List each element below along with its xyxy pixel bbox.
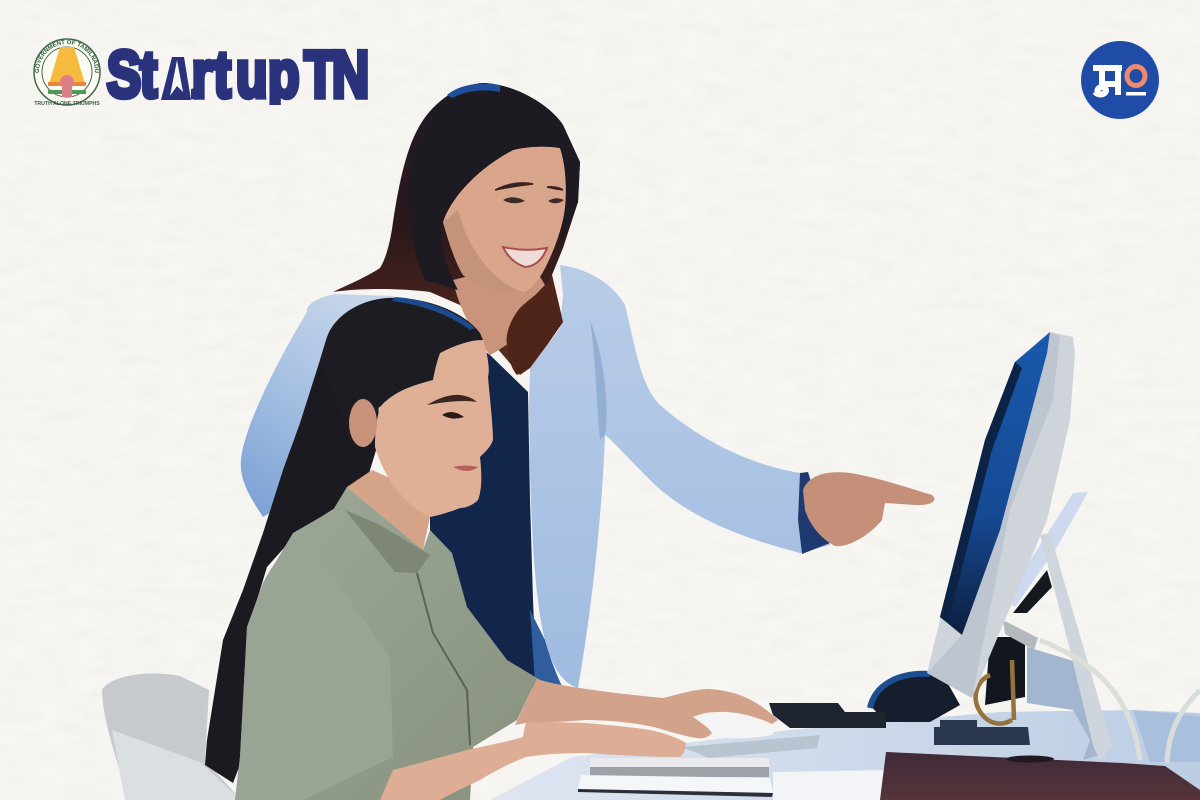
keyboard (590, 758, 769, 777)
standing woman blue highlight in hair (447, 84, 500, 98)
wordmark rocket A mask (162, 60, 191, 100)
monitor screen (940, 332, 1050, 635)
badge mark (1093, 68, 1122, 95)
logo: Government of Tamil Nadu emblem: GOVERNMENT OF TAMILNADU (34, 40, 100, 73)
figure: standing woman (241, 83, 934, 690)
standing woman hair back (333, 83, 580, 375)
standing woman hair top (408, 83, 580, 290)
standing woman navy top (430, 320, 537, 690)
notebook clasp (1006, 756, 1054, 762)
standing woman right hair lock (507, 275, 563, 375)
monitor lighter front band (927, 332, 1060, 698)
cable (1040, 640, 1140, 760)
figure: seated woman (205, 297, 537, 800)
keyboard, mouse and desk items (578, 712, 893, 800)
standing woman neck (453, 260, 545, 355)
seated woman shirt placket (417, 573, 470, 745)
keyboard keys (590, 758, 769, 767)
logo: Government of Tamil Nadu emblem: TRUTH ALONE TRIUMPHS (34, 101, 100, 107)
monitor stand arm (1040, 533, 1112, 762)
seated woman top hair (320, 298, 483, 445)
standing woman face (443, 147, 566, 292)
standing woman blazer front and sleeve (529, 265, 830, 688)
cable plug (1003, 620, 1038, 650)
silver base wedge (1027, 647, 1107, 760)
seated woman ear (349, 399, 377, 447)
seated woman shirt (235, 487, 537, 800)
wordmark rocket A (161, 57, 191, 100)
seated woman blue hair highlight (392, 297, 475, 330)
seated woman neck (347, 470, 440, 550)
right desk blue area (1133, 710, 1200, 762)
desk surface (490, 710, 1200, 800)
wordmark rocket cut-out (170, 60, 183, 96)
trophy (976, 660, 1014, 724)
lower forearm and hand (380, 722, 686, 800)
logo: Government of Tamil Nadu emblem (33, 38, 101, 107)
white paper strip (578, 775, 773, 793)
seated woman collar shadow (345, 510, 430, 573)
keyboard shadow edge (578, 789, 773, 797)
seated woman eye, brow and mouth (427, 395, 478, 471)
monitor screen dark edge (940, 362, 1022, 623)
cable on the right (1167, 690, 1200, 763)
paper behind the monitor (1005, 492, 1088, 607)
laptop edge (682, 735, 820, 758)
monitor accessories (769, 492, 1200, 763)
standing woman blazer left shoulder and arm (241, 294, 395, 517)
monitor silver body (927, 332, 1075, 698)
right white paper (773, 770, 893, 800)
blazer shadow fold (590, 320, 607, 440)
seated woman arms and hands (380, 678, 778, 800)
standing woman cuff (798, 472, 830, 554)
standing woman eyes and smile (495, 183, 564, 267)
notebook: dark leather planner (880, 752, 1200, 800)
logo: round publisher badge (1081, 41, 1159, 119)
seated woman face (375, 340, 493, 517)
mouse (693, 712, 773, 738)
standing woman pointing hand (803, 472, 934, 546)
black cable behind the monitor (1013, 570, 1052, 613)
black panel under the monitor (985, 637, 1025, 705)
trophy base (934, 720, 1030, 745)
coiled cable (769, 703, 886, 728)
standing woman face shadow (443, 210, 523, 292)
headset (870, 674, 960, 722)
blazer lower blue shadow (530, 610, 562, 686)
upper forearm and hand (515, 678, 778, 738)
headset blue band (870, 674, 930, 708)
logo: StartupTN wordmark: StartupTN (107, 37, 369, 111)
icon: computer monitor (927, 332, 1075, 698)
icon: office chair (102, 674, 241, 800)
seated woman long hair (205, 337, 380, 783)
seated woman sleeve (235, 544, 393, 800)
